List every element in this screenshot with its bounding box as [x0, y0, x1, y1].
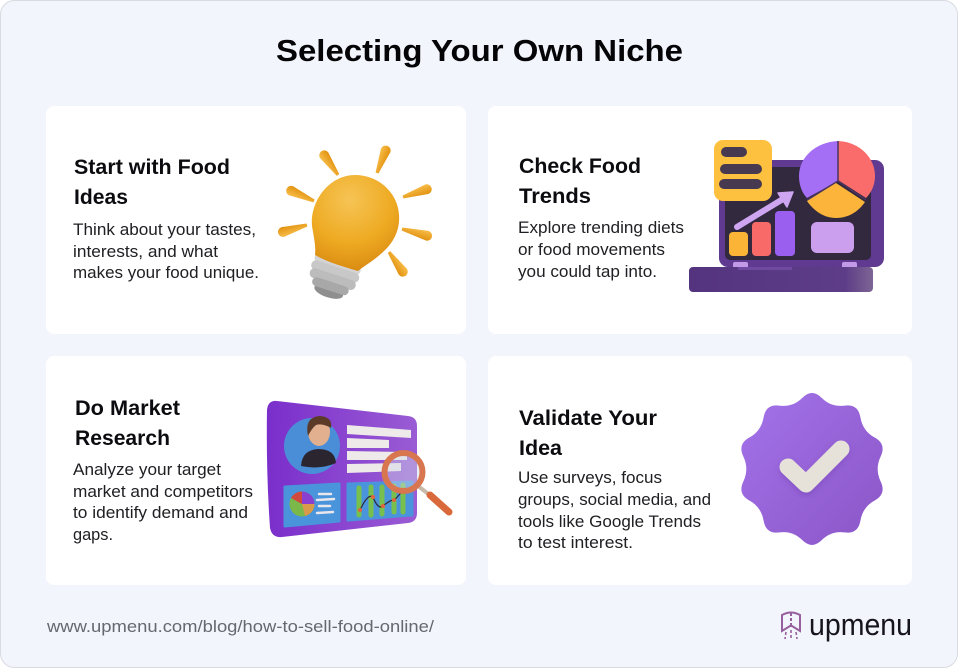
- panel: check food trends: [488, 106, 912, 334]
- text: start with food ideas: interests, and what: [73, 243, 218, 261]
- icon: dashboard with magnifier: [267, 401, 449, 537]
- heading: do market research: Do Market: [75, 397, 180, 420]
- heading: check food trends: [519, 155, 641, 208]
- text: do market research: market and competitors: [73, 483, 253, 501]
- wordmark: upmenu: [809, 607, 912, 642]
- text: validate your idea: [518, 469, 711, 552]
- heading: validate your idea: [519, 407, 657, 460]
- text: do market research: gaps.: [73, 526, 113, 544]
- text: check food trends: Explore trending diets: [518, 219, 684, 237]
- heading: validate your idea: Idea: [519, 437, 562, 460]
- icon: laptop with charts: [689, 140, 884, 292]
- title: Selecting Your Own Niche: [276, 34, 683, 68]
- text: validate your idea: Use surveys, focus: [518, 469, 662, 487]
- text: check food trends: [518, 219, 684, 281]
- heading: start with food ideas: [74, 156, 230, 209]
- heading: start with food ideas: Start with Food: [74, 156, 230, 179]
- heading: validate your idea: Validate Your: [519, 407, 657, 430]
- text: do market research: Analyze your target: [73, 461, 221, 479]
- panel: start with food ideas: [46, 106, 466, 334]
- text: start with food ideas: [73, 221, 259, 282]
- text: do market research: to identify demand and: [73, 504, 248, 522]
- logo: upmenu: [782, 607, 912, 642]
- icon: open book: [782, 612, 800, 640]
- heading: do market research: Research: [75, 427, 170, 450]
- text: check food trends: or food movements: [518, 241, 665, 259]
- text: validate your idea: tools like Google Trends: [518, 513, 701, 531]
- heading: check food trends: Check Food: [519, 155, 641, 178]
- text: start with food ideas: makes your food unique.: [73, 264, 259, 282]
- heading: check food trends: Trends: [519, 185, 591, 208]
- footer url: www.upmenu.com/blog/how-to-sell-food-online/: [46, 618, 434, 636]
- heading: start with food ideas: Ideas: [74, 186, 128, 209]
- heading: do market research: [75, 397, 180, 450]
- text: do market research: [73, 461, 253, 544]
- text: validate your idea: to test interest.: [518, 534, 633, 552]
- panel: validate your idea: [488, 356, 912, 585]
- icon: light bulb: [277, 144, 433, 305]
- text: validate your idea: groups, social media, and: [518, 491, 711, 509]
- text: start with food ideas: Think about your tastes,: [73, 221, 256, 239]
- text: check food trends: you could tap into.: [518, 263, 657, 281]
- icon: check badge: [741, 393, 883, 545]
- panel: do market research: [46, 356, 466, 585]
